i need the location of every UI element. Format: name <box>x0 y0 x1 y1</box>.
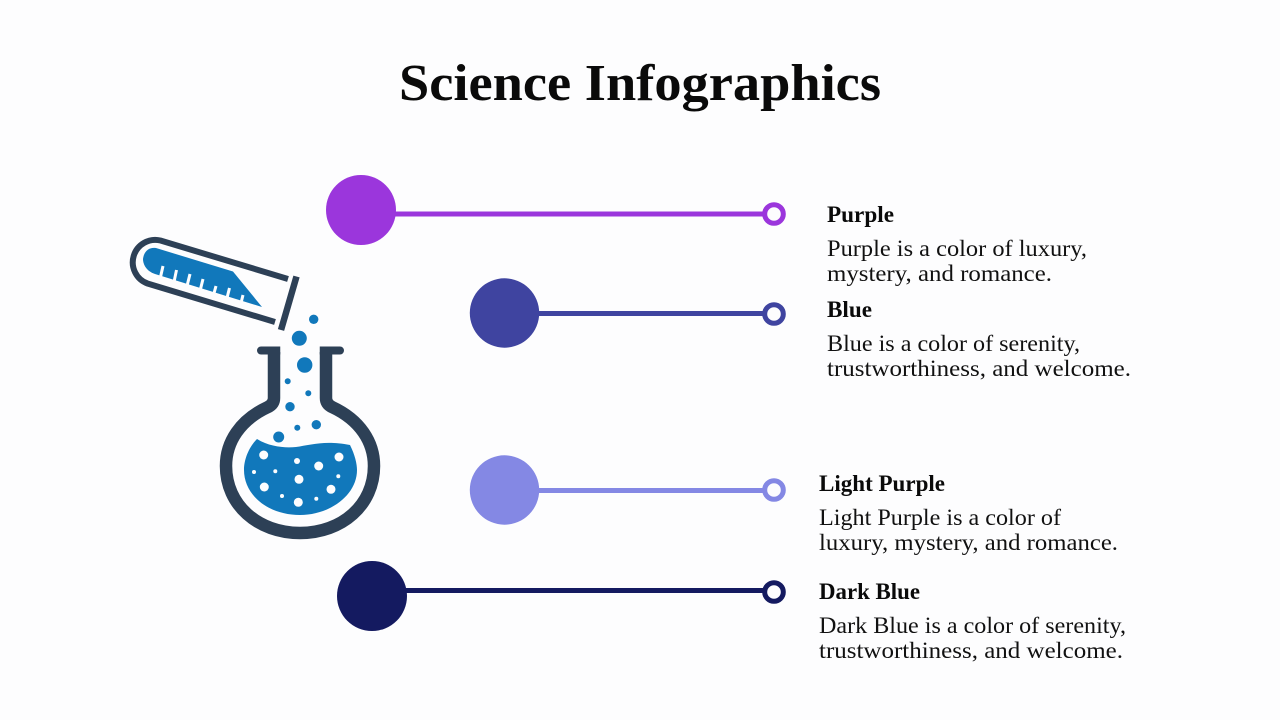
connector: purple <box>326 175 783 245</box>
liquid bubbles <box>252 450 344 507</box>
connector: blue <box>470 278 783 348</box>
falling drops <box>273 315 321 442</box>
icon: flask and test tube <box>133 240 374 533</box>
text block: dark blue <box>819 579 1126 664</box>
icon: test tube <box>133 240 296 330</box>
connector: light purple <box>470 455 783 525</box>
text block: dark blue: Dark Blue is a color of serenity, <box>819 613 1126 639</box>
text block: purple <box>827 202 1087 287</box>
connector: dark blue <box>337 561 783 631</box>
text block: blue: Blue is a color of serenity, <box>827 331 1080 357</box>
text block: purple: Purple is a color of luxury, <box>827 236 1087 262</box>
text block: dark blue: Dark Blue <box>819 579 920 604</box>
text block: light purple: luxury, mystery, and romance. <box>819 530 1118 556</box>
text block: light purple: Light Purple is a color of <box>819 505 1061 531</box>
text block: light purple <box>819 471 1118 556</box>
text block: light purple: Light Purple <box>819 471 945 496</box>
text block: blue: Blue <box>827 297 872 322</box>
text block: purple: mystery, and romance. <box>827 261 1052 287</box>
icon: flask <box>226 346 374 533</box>
text block: blue: trustworthiness, and welcome. <box>827 356 1131 382</box>
title: Science Infographics <box>399 55 881 112</box>
text block: dark blue: trustworthiness, and welcome. <box>819 638 1123 664</box>
text block: purple: Purple <box>827 202 894 227</box>
text block: blue <box>827 297 1131 382</box>
